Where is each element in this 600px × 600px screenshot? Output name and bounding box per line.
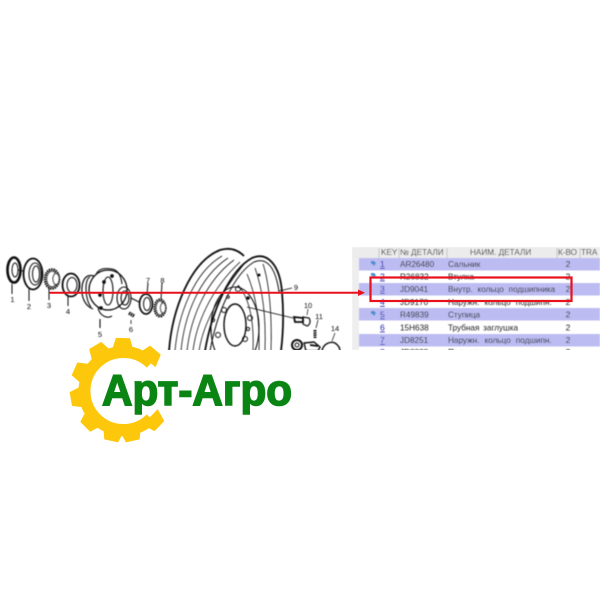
part numbers: 5 xyxy=(98,330,102,339)
row 1: 2 xyxy=(566,259,571,269)
row 1: Сальник xyxy=(448,260,481,269)
part 8: cone bearing xyxy=(155,283,166,316)
row 4: Наружн. кольцо подшипн. xyxy=(448,298,552,307)
row 7: Наружн. кольцо подшипн. xyxy=(448,336,552,345)
row 2: 2 xyxy=(566,272,571,282)
row 7 xyxy=(359,334,600,346)
row 4: 4 xyxy=(380,297,385,307)
row 3 highlighted: 2 xyxy=(566,284,571,294)
row 8 cut off: 8 xyxy=(380,347,385,357)
row 4: JD9170 xyxy=(400,298,429,307)
row 5: 5 xyxy=(380,310,385,320)
part numbers xyxy=(10,276,339,339)
row 2: Втулка xyxy=(448,272,474,282)
part 14: cap xyxy=(322,333,340,351)
part numbers: 2 xyxy=(27,302,31,311)
part numbers: 6 xyxy=(129,325,133,334)
row 3 highlighted: Внутр. кольцо подшипника xyxy=(448,285,556,294)
row 8 cut off: JD8888 xyxy=(400,348,429,357)
table header row: № ДЕТАЛИ xyxy=(400,248,444,257)
part 11: stud xyxy=(315,320,318,338)
table header row: KEY xyxy=(381,248,398,257)
row 1 xyxy=(359,258,600,270)
row 5: R49839 xyxy=(400,310,429,320)
table header row: TRA xyxy=(581,248,598,257)
part numbers: 8 xyxy=(160,276,165,285)
part 3: bearing xyxy=(46,270,59,300)
row 2: 2 xyxy=(380,272,385,282)
row 6: Трубная заглушка xyxy=(448,324,518,332)
logo wordmark: Арт-Агро xyxy=(102,366,292,415)
row 8 cut off: 2 xyxy=(566,347,571,357)
part numbers: 11 xyxy=(315,312,323,321)
part numbers: 14 xyxy=(331,324,339,333)
row 8 cut off: Подшипник xyxy=(448,348,492,357)
row 6: 6 xyxy=(380,322,385,332)
part 1: seal xyxy=(8,258,23,294)
row 3 highlighted xyxy=(359,283,600,296)
row 5: Ступица xyxy=(448,310,481,320)
part numbers: 3 xyxy=(47,301,51,310)
row 5 xyxy=(359,308,600,320)
row 7: 7 xyxy=(380,335,385,345)
row 7: 2 xyxy=(566,335,571,345)
row 4: 2 xyxy=(566,297,571,307)
part 12 and 13: nut and washer xyxy=(292,340,320,351)
part 9: wheel rim xyxy=(167,247,294,350)
part numbers: 7 xyxy=(146,276,150,285)
part numbers: 10 xyxy=(304,301,312,310)
part numbers: 4 xyxy=(66,307,70,316)
row 6: 2 xyxy=(566,322,571,332)
row 8 cut off xyxy=(380,348,570,350)
logo: Арт-Агро xyxy=(69,338,292,443)
table header row: НАИМ. ДЕТАЛИ xyxy=(470,248,531,257)
red arrow from part 3 to table row xyxy=(49,290,365,296)
row 5: 2 xyxy=(566,310,571,320)
row 2: R26832 xyxy=(400,272,429,282)
row 7: JD8251 xyxy=(400,336,429,345)
part 6: spring pin xyxy=(129,313,134,324)
row 6 xyxy=(380,322,571,332)
row 1: 1 xyxy=(380,259,385,269)
part 10: bolt xyxy=(294,309,310,326)
row 3 highlighted: 3 xyxy=(380,284,385,294)
row 6: 15H638 xyxy=(400,324,429,332)
row 3 highlighted: JD9041 xyxy=(400,285,429,294)
part numbers: 1 xyxy=(10,295,15,304)
table header row: К-ВО xyxy=(558,248,577,257)
parts diagram: exploded wheel hub xyxy=(5,247,342,350)
row 4 xyxy=(380,297,571,307)
row 2 xyxy=(371,272,571,282)
table left gutter xyxy=(352,258,359,350)
part numbers: 9 xyxy=(294,283,298,292)
red highlight rectangle xyxy=(370,278,572,301)
table header row xyxy=(352,247,600,258)
parts table screenshot xyxy=(352,247,600,357)
icon: yellow gear xyxy=(69,338,167,443)
part 2: outer race xyxy=(24,258,42,301)
part 4: ring xyxy=(62,274,80,306)
part 5: hub xyxy=(82,269,139,328)
row 1: AR26480 xyxy=(400,260,435,269)
part 7: bearing race xyxy=(140,283,152,314)
